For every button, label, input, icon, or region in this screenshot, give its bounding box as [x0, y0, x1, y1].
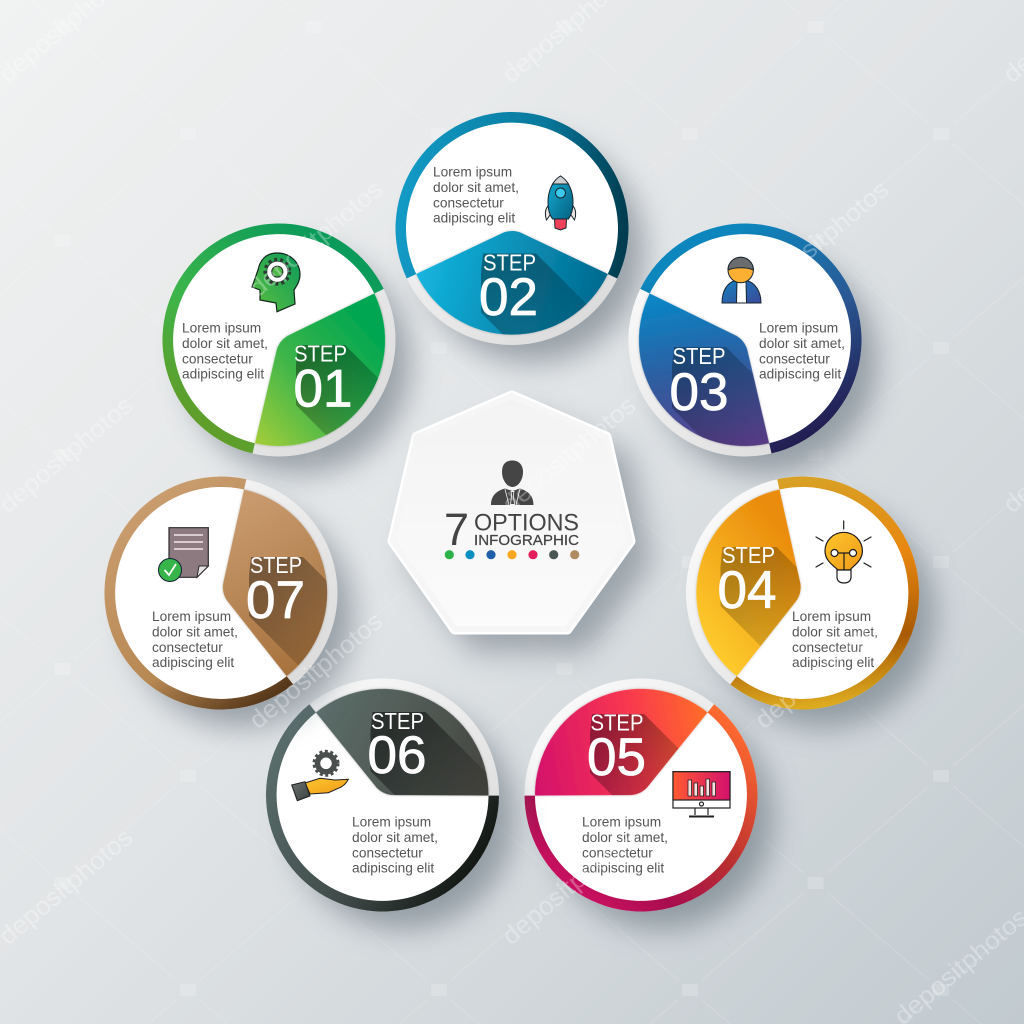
panel: step 1 [162, 224, 428, 491]
watermark text: depositphotos [750, 175, 894, 303]
body text: Lorem ipsum [759, 320, 838, 336]
panel: step 4 [678, 468, 942, 733]
long shadow [370, 712, 488, 796]
central shadow [407, 412, 652, 652]
body text: Lorem ipsum [352, 814, 431, 830]
body text: consectetur [582, 845, 653, 860]
wedge [509, 658, 726, 834]
body text: adipiscing elit [792, 655, 874, 670]
step number: 06 [368, 726, 426, 785]
body text: Lorem ipsum [152, 609, 231, 624]
step number: 04 [718, 561, 776, 620]
title: 7 options infographic: INFOGRAPHIC [474, 532, 579, 549]
body text: dolor sit amet, [582, 830, 668, 845]
body text: dolor sit amet, [792, 624, 878, 639]
body text: Lorem ipsum [792, 609, 871, 624]
title: 7 options infographic: OPTIONS [474, 510, 579, 536]
body text: consectetur [792, 640, 863, 655]
icon: person in suit [722, 257, 761, 303]
wedge [602, 267, 803, 481]
icon: light bulb [816, 521, 871, 583]
wedge [678, 476, 821, 686]
body text: adipiscing elit [759, 367, 841, 382]
icon: rocket [545, 176, 576, 230]
body text: adipiscing elit [182, 367, 264, 382]
body text: consectetur [182, 351, 253, 366]
watermark text: depositphotos [497, 823, 641, 951]
body text: Lorem ipsum [433, 164, 512, 180]
step label: STEP [483, 250, 536, 276]
watermark text: depositphotos [244, 607, 388, 735]
body text: dolor sit amet, [352, 830, 438, 845]
step label: STEP [371, 708, 424, 734]
body text: consectetur [759, 351, 830, 366]
panel: step 6 [266, 678, 530, 945]
step number: 07 [246, 571, 305, 630]
long shadow [590, 714, 678, 796]
icon: monitor with chart [673, 772, 730, 816]
body text: adipiscing elit [433, 211, 515, 226]
ring segment [633, 176, 909, 462]
long shadow [249, 557, 328, 666]
long shadow [672, 347, 768, 446]
ring segment [227, 699, 509, 951]
step number: 03 [670, 363, 728, 422]
wedge [221, 267, 422, 481]
body text: adipiscing elit [152, 655, 234, 670]
watermark text: depositphotos [244, 175, 388, 303]
title: 7 options infographic: 7 [444, 504, 469, 555]
body text: Lorem ipsum [182, 320, 261, 336]
body text: dolor sit amet, [759, 336, 845, 351]
panel: step 3 [628, 224, 894, 490]
icon: hand holding gear [292, 751, 348, 801]
long shadow [720, 547, 800, 646]
ring segment [115, 176, 391, 462]
body text: dolor sit amet, [433, 180, 519, 195]
step number: 02 [479, 268, 538, 327]
body text: dolor sit amet, [152, 624, 238, 639]
step label: STEP [250, 552, 302, 578]
body text: consectetur [352, 845, 423, 860]
panel: centre heptagon [393, 396, 630, 629]
body text: consectetur [152, 640, 223, 655]
watermark text: depositphotos [750, 607, 894, 735]
icon: document with check [158, 528, 208, 582]
ring segment [396, 112, 628, 278]
step number: 05 [587, 728, 646, 787]
step label: STEP [294, 341, 347, 367]
colour key dots [445, 550, 579, 559]
icon: businessman [491, 460, 534, 505]
ring segment [81, 468, 296, 733]
watermark text: depositphotos [497, 391, 641, 519]
icon: head with gear [252, 253, 300, 312]
step label: STEP [672, 343, 726, 369]
panel: step 2 [396, 112, 660, 380]
step label: STEP [590, 710, 644, 736]
title: 7 options infographic [444, 504, 579, 555]
ring segment [514, 699, 797, 951]
body text: dolor sit amet, [182, 336, 268, 351]
body text: Lorem ipsum [582, 814, 661, 830]
step number: 01 [294, 360, 352, 419]
long shadow [296, 345, 378, 435]
wedge [297, 658, 515, 834]
wedge [416, 231, 608, 335]
body text: consectetur [433, 195, 504, 210]
step label: STEP [722, 542, 775, 568]
body text: adipiscing elit [582, 861, 664, 876]
long shadow [481, 254, 586, 335]
panel: step 5 [524, 678, 788, 944]
ring segment [728, 468, 942, 733]
wedge [202, 476, 346, 686]
body text: adipiscing elit [352, 861, 434, 876]
panel: step 7 [104, 476, 370, 744]
